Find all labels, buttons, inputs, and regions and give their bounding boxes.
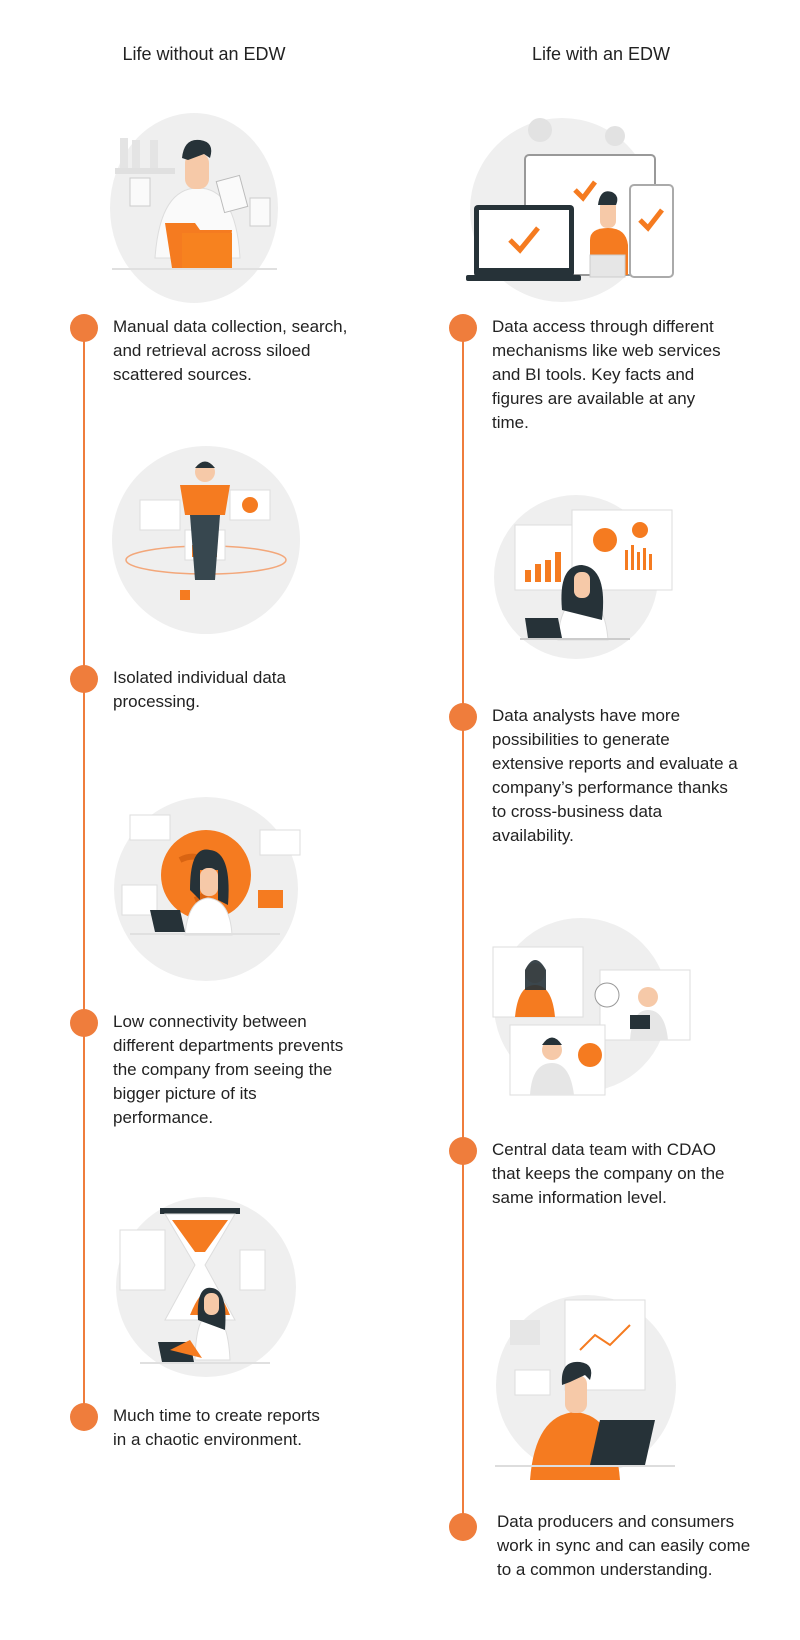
illustration: hourglass	[116, 1197, 296, 1377]
illustration: man juggling charts	[112, 446, 300, 634]
text 3 right: same information level.	[492, 1188, 667, 1207]
text 2 right: to cross-business data	[492, 802, 662, 821]
text 1 right: Data access through different	[492, 317, 714, 336]
text 4 right: Data producers and consumers	[497, 1512, 734, 1531]
text 2 right: Data analysts have more	[492, 706, 680, 725]
text 3 right: Central data team with CDAO	[492, 1140, 716, 1159]
illustration: analyst with charts	[494, 495, 672, 659]
illustration: man with folder	[110, 113, 278, 303]
text 1 right: time.	[492, 413, 529, 432]
text 1 right: mechanisms like web services	[492, 341, 721, 360]
text 3 left	[113, 1012, 343, 1127]
text 1 left	[113, 317, 347, 384]
timeline line left	[83, 328, 85, 1417]
bullet 3 left	[70, 1009, 98, 1037]
bullet 2 right	[449, 703, 477, 731]
title: left column: Life without an EDW	[122, 44, 286, 64]
bullet 2 left	[70, 665, 98, 693]
bullet 1 left	[70, 314, 98, 342]
timeline line right	[462, 328, 464, 1527]
illustration: video call team	[492, 918, 690, 1096]
illustration: man at laptop	[495, 1295, 676, 1480]
text 4 left	[113, 1406, 320, 1449]
text 3 left: performance.	[113, 1108, 213, 1127]
illustration: woman with globe	[114, 797, 300, 981]
text 3 left: Low connectivity between	[113, 1012, 307, 1031]
text 1 left: scattered sources.	[113, 365, 252, 384]
text 3 left: bigger picture of its	[113, 1084, 257, 1103]
text 2 right: availability.	[492, 826, 574, 845]
text 2 right	[492, 706, 738, 845]
bullet 1 right	[449, 314, 477, 342]
text 1 left: and retrieval across siloed	[113, 341, 310, 360]
title: right column: Life with an EDW	[532, 44, 670, 64]
text 3 left: different departments prevents	[113, 1036, 343, 1055]
text 2 right: possibilities to generate	[492, 730, 670, 749]
text 1 right	[492, 317, 721, 432]
text 4 left: Much time to create reports	[113, 1406, 320, 1425]
text 3 right	[492, 1140, 724, 1207]
text 1 right: and BI tools. Key facts and	[492, 365, 694, 384]
text 3 left: the company from seeing the	[113, 1060, 332, 1079]
bullet 4 right	[449, 1513, 477, 1541]
text 2 right: company’s performance thanks	[492, 778, 728, 797]
text 1 left: Manual data collection, search,	[113, 317, 347, 336]
text 4 right	[497, 1512, 750, 1579]
text 4 right: to a common understanding.	[497, 1560, 712, 1579]
text 4 left: in a chaotic environment.	[113, 1430, 302, 1449]
text 2 right: extensive reports and evaluate a	[492, 754, 738, 773]
text 2 left: Isolated individual data	[113, 668, 286, 687]
text 2 left	[113, 668, 286, 711]
text 1 right: figures are available at any	[492, 389, 695, 408]
text 4 right: work in sync and can easily come	[497, 1536, 750, 1555]
text 2 left: processing.	[113, 692, 200, 711]
bullet 4 left	[70, 1403, 98, 1431]
bullet 3 right	[449, 1137, 477, 1165]
illustration: screens with checkmarks	[466, 118, 674, 302]
text 3 right: that keeps the company on the	[492, 1164, 724, 1183]
